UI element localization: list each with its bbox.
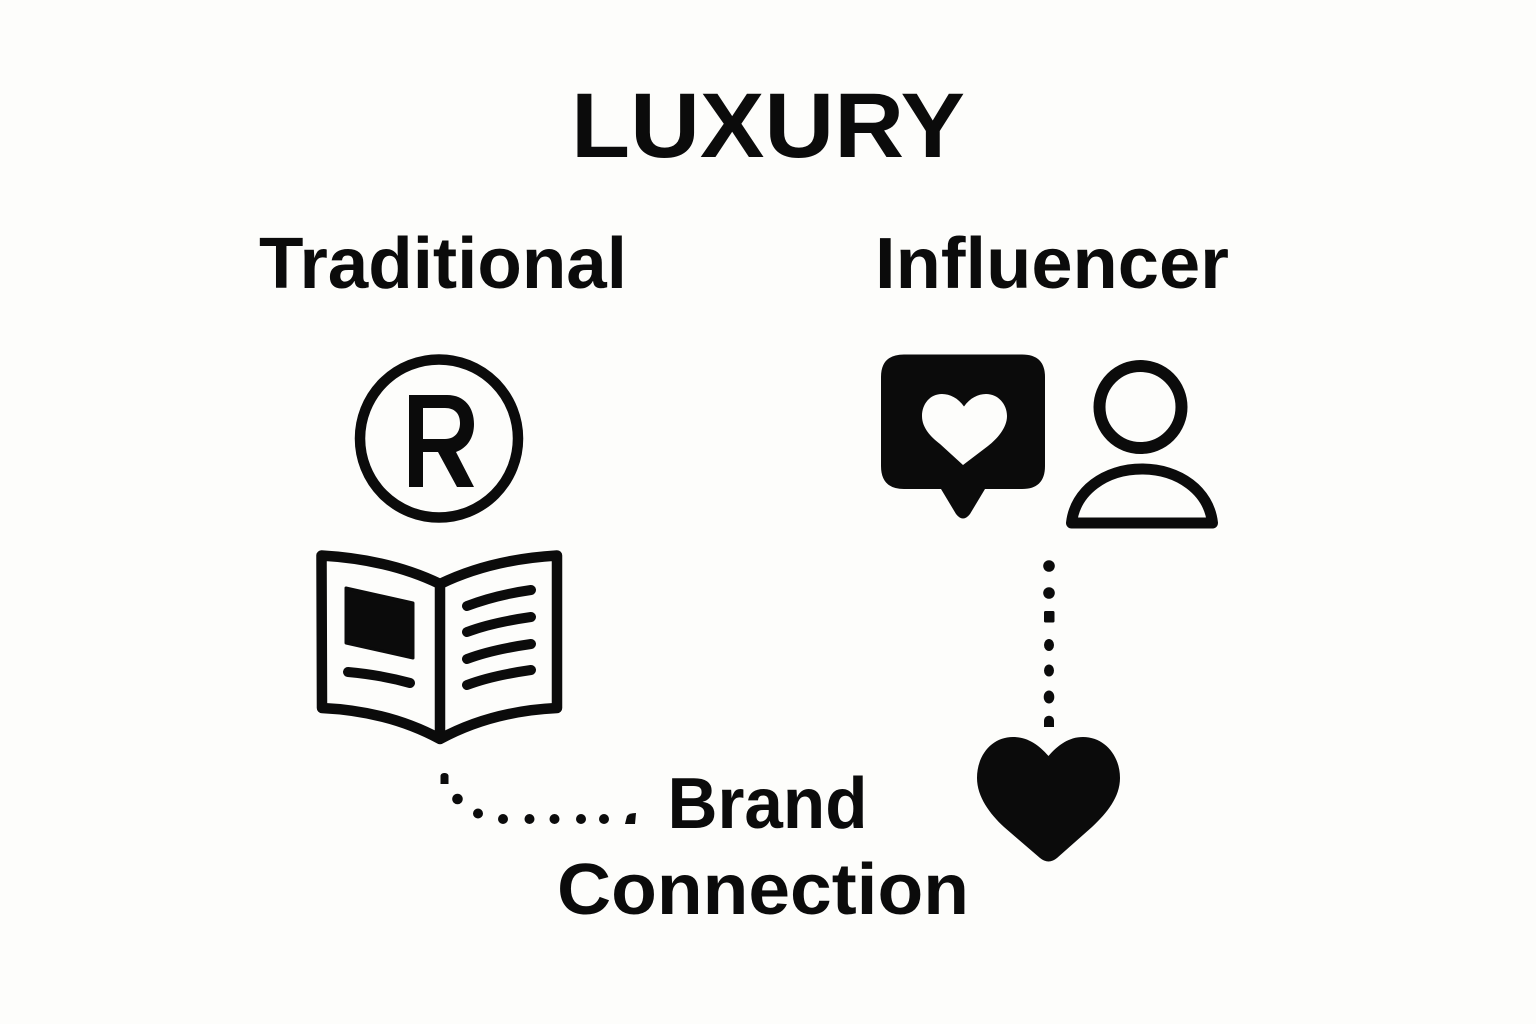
label: Brand Connection: Brand [668, 764, 868, 844]
label: Brand Connection [557, 764, 969, 930]
dotted line: magazine to brand connection [440, 773, 636, 824]
icon: open magazine [322, 556, 557, 739]
icon: heart [977, 737, 1120, 862]
heading: Influencer: Influencer [875, 224, 1229, 304]
label: Brand Connection: Connection [557, 850, 969, 930]
title: LUXURY [571, 75, 965, 177]
heading: Traditional: Traditional [259, 224, 627, 304]
icon: registered trademark [360, 360, 518, 518]
icon: heart speech bubble [881, 354, 1045, 518]
icon: person [1072, 366, 1212, 523]
dotted arrow: person to heart [1043, 560, 1055, 727]
